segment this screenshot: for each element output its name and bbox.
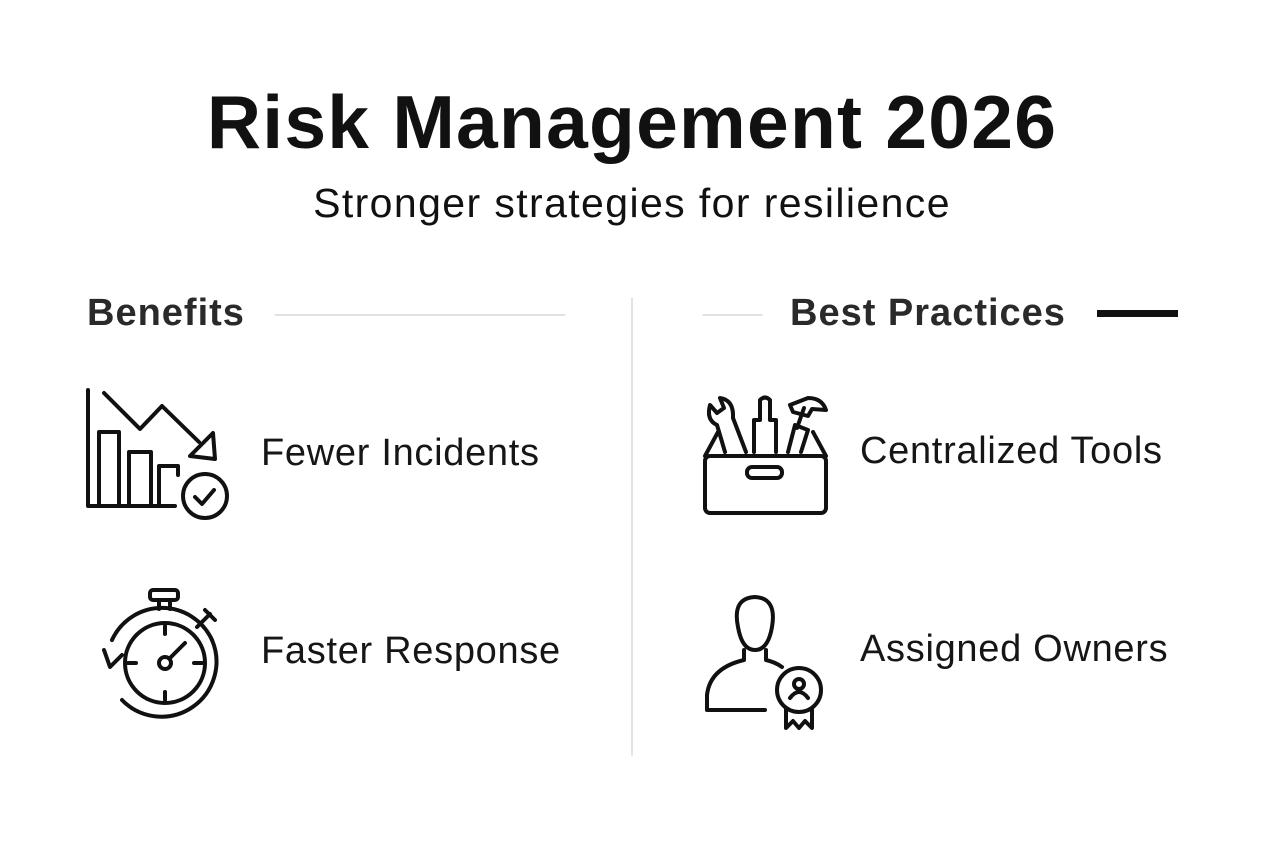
- icon: stopwatch: [104, 590, 216, 717]
- icon: toolbox: [705, 398, 826, 513]
- subtitle: Stronger strategies for resilience: [313, 180, 951, 226]
- icon: person with badge: [707, 597, 821, 728]
- title: Risk Management 2026: [207, 80, 1057, 164]
- accent bar: [1097, 310, 1178, 317]
- item text: Centralized Tools: Centralized Tools: [860, 430, 1163, 472]
- item text: Faster Response: Faster Response: [261, 630, 561, 672]
- item text: Assigned Owners: Assigned Owners: [860, 628, 1168, 670]
- icon: chart with check: [88, 390, 227, 518]
- heading: Best Practices: Best Practices: [790, 292, 1066, 334]
- item text: Fewer Incidents: Fewer Incidents: [261, 432, 540, 474]
- heading: Benefits: Benefits: [87, 292, 245, 334]
